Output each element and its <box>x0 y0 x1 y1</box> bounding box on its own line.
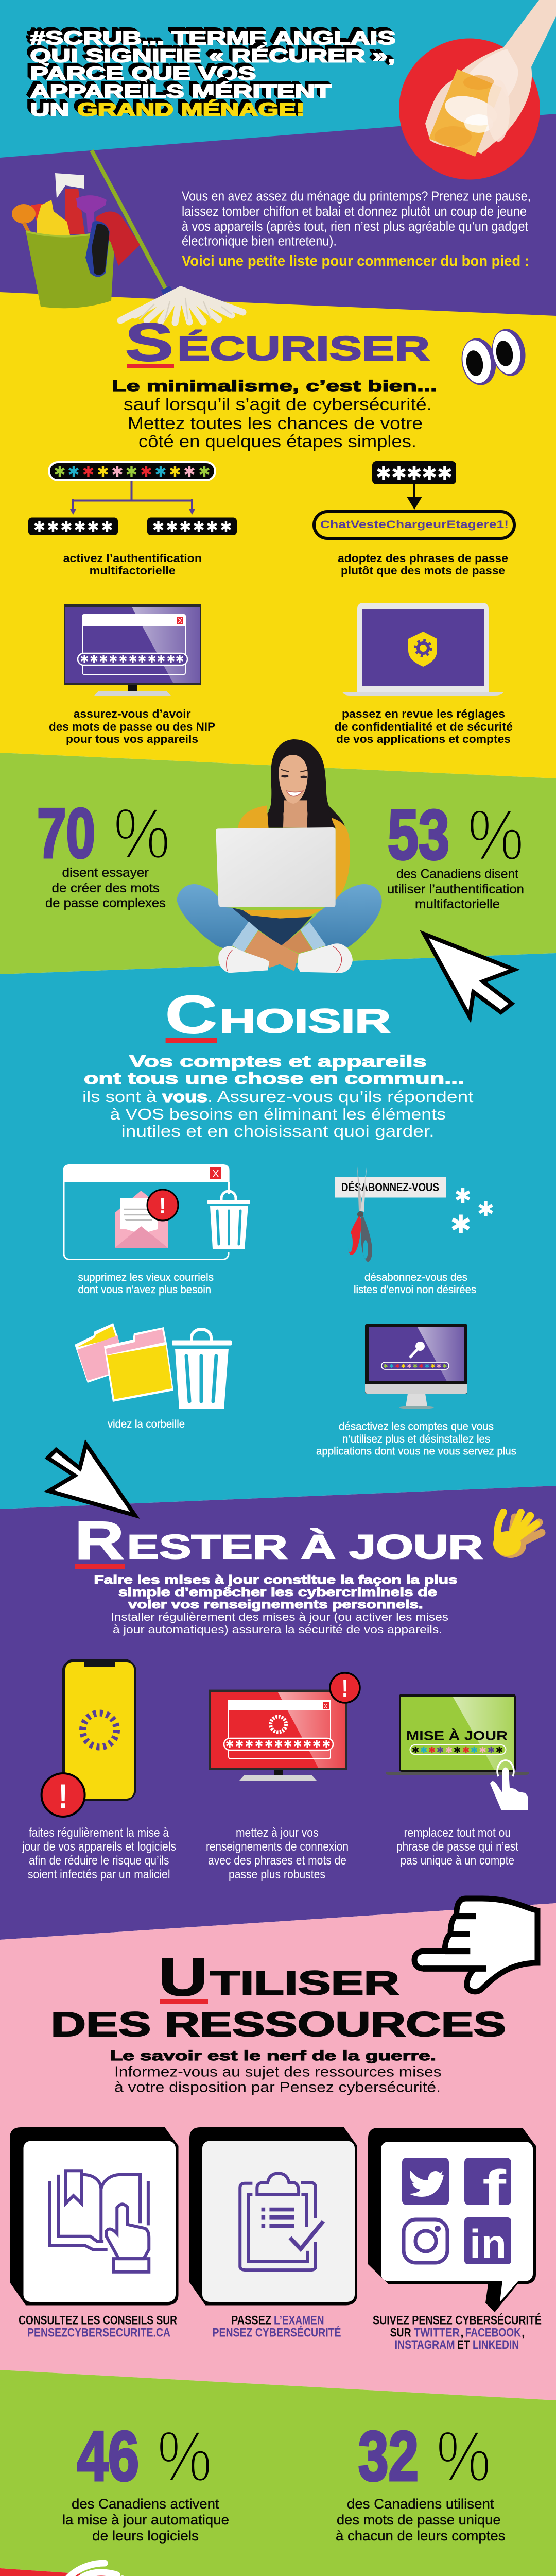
text block: choisir intro: ils sont à <box>82 1088 157 1106</box>
panel background: securiser yellow <box>0 292 556 778</box>
caption: deactivate accounts: n’utilisez plus et désinstallez les <box>342 1433 490 1445</box>
icon: multifactor authentication: ✱ <box>74 518 86 535</box>
icon: desktop with key and password: ✱ <box>401 1363 406 1369</box>
icon: desktop with key and password: ✱ <box>442 1363 447 1369</box>
stat: 70 percent: % <box>113 793 170 874</box>
stat: 32 percent <box>336 2416 506 2544</box>
title: GRAND MÉNAGE! <box>77 99 305 120</box>
icon: passphrase: ✱ <box>406 463 422 484</box>
icon: multifactor authentication: ✱ <box>183 463 196 480</box>
icon: desktop with key and password: ✱ <box>395 1363 400 1369</box>
icon: passphrase: ✱ <box>437 463 453 484</box>
icon: desktop monitor password: ✱ <box>176 653 184 665</box>
caption: update credentials: renseignements de connexion <box>206 1840 349 1854</box>
caption: unsubscribe: désabonnez-vous des <box>364 1272 467 1283</box>
stat: 70 percent: 70 <box>37 794 95 872</box>
caption: old emails: dont vous n’avez plus besoin <box>78 1284 211 1296</box>
caption: update credentials: mettez à jour vos <box>236 1826 318 1840</box>
icon: red monitor login with alert: X <box>323 1703 328 1710</box>
caption: passwords: des mots de passe ou des NIP <box>49 720 215 733</box>
caption: conseils: PENSEZCYBERSECURITE.CA <box>27 2326 170 2340</box>
text block: securiser intro: sauf lorsqu’il s’agit de cybersécurité. <box>124 395 432 414</box>
icon: multifactor authentication: ✱ <box>154 463 167 480</box>
icon: green laptop update with hand: ✱ <box>479 1745 486 1756</box>
icon: red monitor login with alert: ✱ <box>322 1738 331 1750</box>
icon: passphrase: ChatVesteChargeurEtagere1! <box>320 519 509 531</box>
icon: red monitor login with alert: ✱ <box>265 1738 273 1750</box>
caption: examen: L’EXAMEN <box>274 2314 324 2328</box>
stat: 32 percent: à chacun de leurs comptes <box>336 2528 506 2544</box>
stat: 53 percent: des Canadiens disent <box>396 867 518 882</box>
icon: linkedin: in <box>470 2221 507 2266</box>
caption: conseils <box>19 2314 177 2340</box>
icon: multifactor authentication: ✱ <box>198 463 211 480</box>
icon: passphrase: ✱ <box>391 463 407 484</box>
icon: multifactor authentication: ✱ <box>166 518 178 535</box>
icon: red monitor login with alert: ✱ <box>312 1738 321 1750</box>
stat: 53 percent: % <box>467 794 524 875</box>
caption: social: INSTAGRAM <box>395 2338 455 2352</box>
text block: ressources intro: Le savoir est le nerf de la guerre. <box>110 2048 436 2063</box>
heading: rester a jour: R <box>75 1511 124 1570</box>
stat: 46 percent: la mise à jour automatique <box>62 2512 229 2528</box>
text block: choisir intro: à VOS besoins en éliminant les éléments <box>110 1105 446 1123</box>
caption: examen: PENSEZ CYBERSÉCURITÉ <box>212 2326 341 2340</box>
caption: passphrase <box>338 552 508 577</box>
panel: rester a jour <box>22 1511 542 1882</box>
icon: facebook <box>464 2158 511 2217</box>
icon: facebook: f <box>482 2160 507 2217</box>
icon: passphrase <box>314 461 514 538</box>
icon: multifactor authentication: ✱ <box>193 518 205 535</box>
stat: 53 percent <box>387 794 524 911</box>
stat: 46 percent: de leurs logiciels <box>92 2528 199 2544</box>
heading: choisir: HOISIR <box>220 1002 391 1040</box>
icon: folders and trash <box>75 1323 232 1409</box>
panel background: header teal <box>0 0 556 319</box>
icon: red monitor login with alert: ✱ <box>284 1738 292 1750</box>
text block: rester intro: Installer régulièrement des mises à jour (ou activer les mises <box>111 1611 448 1623</box>
icon: multifactor authentication: ✱ <box>33 518 45 535</box>
stat: 32 percent: 32 <box>358 2417 419 2495</box>
text block: ressources intro: Informez-vous au sujet des ressources mises <box>114 2064 442 2080</box>
panel background: ressources pink <box>0 1903 556 2400</box>
icon: multifactor authentication: ✱ <box>220 518 232 535</box>
icon: green laptop update with hand: ✱ <box>495 1745 503 1756</box>
icon: green laptop update with hand: ✱ <box>487 1745 495 1756</box>
icon: desktop monitor password: ✱ <box>148 653 156 665</box>
caption: update devices: jour de vos appareils et logiciels <box>22 1840 176 1854</box>
title: QUI SIGNIFIE « RÉCURER », <box>30 45 395 66</box>
text block: intro: à vos appareils (après tout, rien n’est plus agréable qu’un gadget <box>182 219 528 234</box>
panel: choisir <box>48 985 516 1515</box>
stat: 46 percent <box>62 2416 229 2544</box>
icon: multifactor authentication: ✱ <box>169 463 181 480</box>
text block: securiser intro: côté en quelques étapes simples. <box>138 432 416 451</box>
icon: green laptop update with hand: ✱ <box>411 1745 420 1756</box>
panel background: intro purple <box>0 114 556 319</box>
text block: intro: électronique bien entretenu). <box>182 234 337 248</box>
icon: multifactor authentication: ✱ <box>140 463 152 480</box>
title <box>30 27 395 120</box>
icon: scissors cutting unsubscribe: ✱ <box>477 1198 494 1222</box>
caption: update devices: afin de réduire le risque qu’ils <box>29 1854 169 1868</box>
panel: stats 46 and 32 <box>62 2416 506 2544</box>
icon: fingerprint <box>60 2563 144 2576</box>
icon: multifactor authentication: ✱ <box>206 518 218 535</box>
caption: social <box>373 2313 542 2352</box>
heading: utiliser des ressources: DES RESSOURCES <box>50 2005 506 2044</box>
icon: multifactor authentication <box>28 462 237 535</box>
icon: green laptop update with hand: ✱ <box>453 1745 461 1756</box>
title: PARCE QUE VOS <box>30 63 256 84</box>
card: social media icons <box>368 2128 536 2312</box>
icon: desktop with key and password: ✱ <box>419 1363 424 1369</box>
icon: desktop monitor password: ✱ <box>109 653 117 665</box>
stat: 70 percent: disent essayer <box>62 866 149 880</box>
text block: securiser intro: Mettez toutes les chances de votre <box>128 414 423 433</box>
text block: securiser intro: Le minimalisme, c’est bien... <box>112 378 437 395</box>
icon: twitter <box>402 2158 449 2205</box>
caption: passphrase: adoptez des phrases de passe <box>338 552 508 565</box>
caption: passwords: pour tous vos appareils <box>66 733 198 745</box>
icon: email window and trash <box>63 1164 250 1259</box>
caption: privacy settings: passez en revue les réglages <box>342 707 505 720</box>
caption: passwords: assurez-vous d’avoir <box>74 707 191 720</box>
caption: passwords <box>49 707 215 745</box>
icon: instagram <box>404 2219 447 2263</box>
stat: 46 percent: des Canadiens activent <box>72 2496 219 2512</box>
icon: multifactor authentication: ✱ <box>179 518 192 535</box>
stat: 32 percent: % <box>436 2416 491 2497</box>
icon: desktop monitor password <box>64 604 201 696</box>
text block: rester intro: à jour automatiques) assurera la sécurité de vos appareils. <box>113 1623 442 1636</box>
heading: rester a jour <box>75 1511 483 1570</box>
caption: social: LINKEDIN <box>473 2338 519 2352</box>
icon: red monitor login with alert: ✱ <box>245 1738 253 1750</box>
heading: choisir <box>165 985 391 1045</box>
icon: multifactor authentication: ✱ <box>82 463 94 480</box>
icon: scissors cutting unsubscribe <box>335 1166 494 1262</box>
heading: utiliser des ressources <box>50 1947 506 2044</box>
icon: green laptop update with hand: ✱ <box>470 1745 478 1756</box>
icon: cursor arrow <box>424 934 514 1017</box>
icon: desktop monitor password: ✱ <box>119 653 127 665</box>
icon: email window and trash: ! <box>159 1193 166 1218</box>
caption: unsubscribe: listes d’envoi non désirées <box>354 1284 476 1296</box>
panel background: bloquer red <box>0 2568 556 2576</box>
text block: choisir intro: . Assurez-vous qu’ils répondent <box>207 1088 474 1106</box>
title: APPAREILS MÉRITENT <box>30 81 332 102</box>
icon: cursor arrow pointing down-right <box>48 1444 135 1515</box>
text block: ressources intro: à votre disposition par Pensez cybersécurité. <box>114 2079 441 2095</box>
icon: desktop with key and password: ✱ <box>425 1363 429 1369</box>
icon: phone updating with alert: ! <box>59 1777 68 1815</box>
stat: 53 percent: 53 <box>388 795 449 874</box>
panel background: rester a jour purple <box>0 1486 556 1940</box>
icon: desktop with key and password: ✱ <box>407 1363 412 1369</box>
text block: rester intro: voler vos renseignements personnels. <box>128 1598 423 1611</box>
stat: 46 percent: 46 <box>77 2417 139 2495</box>
text block: choisir intro: inutiles et en choisissant quoi garder. <box>121 1122 435 1140</box>
icon: phone updating with alert <box>42 1659 136 1817</box>
icon: multifactor authentication: ✱ <box>67 463 80 480</box>
caption: unique passwords: pas unique à un compte <box>401 1854 514 1868</box>
text block: choisir intro: Vos comptes et appareils <box>129 1052 426 1071</box>
icon: clapping hands <box>493 1512 542 1558</box>
icon: red monitor login with alert: ✱ <box>235 1738 244 1750</box>
caption: social: ET <box>457 2338 470 2352</box>
icon: laptop shield gear <box>342 603 503 696</box>
stat: 53 percent: utiliser l’authentification <box>387 882 524 896</box>
icon: multifactor authentication: ✱ <box>126 463 137 480</box>
heading: securiser: ÉCURISER <box>177 329 430 367</box>
icon: desktop monitor password: ✱ <box>80 653 89 665</box>
heading: securiser <box>125 313 430 372</box>
icon: desktop with key and password <box>365 1324 467 1409</box>
icon: red monitor login with alert: ✱ <box>293 1738 302 1750</box>
panel: securiser <box>28 313 529 745</box>
icon: cartoon eyes <box>458 326 529 388</box>
icon: pointing hand <box>414 1899 537 1992</box>
icon: hand with sponge in red circle <box>399 0 556 179</box>
stat: 32 percent: des mots de passe unique <box>337 2512 500 2528</box>
caption: examen: PASSEZ <box>231 2314 271 2328</box>
caption: update credentials: passe plus robustes <box>229 1868 325 1882</box>
icon: multifactor authentication: ✱ <box>47 518 59 535</box>
icon: desktop with key and password: ✱ <box>413 1363 418 1369</box>
stat: 70 percent: de passe complexes <box>45 896 166 910</box>
caption: social: , <box>460 2326 464 2340</box>
text block: rester intro: simple d’empêcher les cybercriminels de <box>118 1585 437 1599</box>
caption: privacy settings: de vos applications et comptes <box>336 733 511 745</box>
heading: rester a jour: ESTER À JOUR <box>127 1528 483 1566</box>
icon: multifactor authentication: ✱ <box>54 463 66 480</box>
icon: scissors cutting unsubscribe: DÉSABONNEZ-VOUS <box>341 1181 439 1194</box>
photo: woman with laptop <box>177 739 382 973</box>
icon: multifactor authentication: ✱ <box>101 518 113 535</box>
icon: desktop monitor password: ✱ <box>129 653 137 665</box>
text block: rester intro: Faire les mises à jour constitue la façon la plus <box>94 1573 457 1586</box>
text block: intro: Voici une petite liste pour commencer du bon pied : <box>182 253 529 269</box>
panel: header <box>30 0 556 179</box>
text block: choisir intro <box>82 1052 474 1140</box>
caption: deactivate accounts: désactivez les comptes que vous <box>339 1421 494 1432</box>
icon: scissors cutting unsubscribe: ✱ <box>450 1210 472 1240</box>
icon: email window and trash: X <box>212 1168 219 1180</box>
icon: multifactor authentication: ✱ <box>152 518 164 535</box>
card: conseils book icon <box>10 2127 178 2305</box>
caption: passphrase: plutôt que des mots de passe <box>341 564 505 577</box>
icon: multifactor authentication: ✱ <box>60 518 73 535</box>
heading: utiliser des ressources: TILISER <box>210 1964 399 2002</box>
icon: green laptop update with hand: ✱ <box>420 1745 428 1756</box>
icon: desktop monitor password: ✱ <box>90 653 98 665</box>
stat: 53 percent: multifactorielle <box>415 897 500 911</box>
caption: update credentials: avec des phrases et mots de <box>208 1854 346 1868</box>
icon: multifactor authentication: ✱ <box>87 518 99 535</box>
stat: 32 percent: des Canadiens utilisent <box>347 2496 494 2512</box>
caption: conseils: CONSULTEZ LES CONSEILS SUR <box>19 2314 177 2328</box>
panel: intro <box>12 150 531 323</box>
caption: multifactor: multifactorielle <box>90 564 176 577</box>
heading: securiser: S <box>125 313 173 372</box>
caption: unique passwords: remplacez tout mot ou <box>404 1826 511 1840</box>
icon: multifactor authentication: ✱ <box>97 463 109 480</box>
icon: desktop with key and password: ✱ <box>389 1363 394 1369</box>
panel background: choisir teal <box>0 953 556 1509</box>
icon: desktop with key and password: ✱ <box>383 1363 388 1369</box>
icon: green laptop update with hand: ✱ <box>462 1745 470 1756</box>
text block: intro: laissez tomber chiffon et balai et donnez plutôt un coup de jeune <box>182 205 527 219</box>
icon: desktop with key and password: ✱ <box>437 1363 441 1369</box>
icon: red monitor login with alert: ✱ <box>225 1738 234 1750</box>
heading: utiliser des ressources: U <box>159 1947 207 2007</box>
stat: 70 percent <box>37 793 170 910</box>
caption: examen <box>212 2314 341 2340</box>
icon: green laptop update with hand: MISE À JOUR <box>406 1728 508 1743</box>
icon: red monitor login with alert <box>209 1673 360 1781</box>
icon: desktop monitor password: ✱ <box>138 653 146 665</box>
caption: update devices: faites régulièrement la mise à <box>29 1826 169 1840</box>
panel: stats 70 and 53 <box>37 739 524 1017</box>
caption: social: SUR <box>390 2326 411 2340</box>
card: examen clipboard icon <box>189 2127 357 2305</box>
icon: green laptop update with hand: ✱ <box>445 1745 453 1756</box>
text block: securiser intro <box>112 378 437 451</box>
caption: old emails <box>78 1272 214 1296</box>
caption: privacy settings <box>335 707 513 745</box>
icon: passphrase: ✱ <box>376 463 391 484</box>
caption: social: FACEBOOK <box>465 2326 522 2340</box>
panel background: stats green <box>0 753 556 974</box>
icon: green laptop update with hand: ✱ <box>436 1745 444 1756</box>
icon: red monitor login with alert: ✱ <box>255 1738 263 1750</box>
icon: desktop monitor password: ✱ <box>99 653 108 665</box>
heading: choisir: C <box>165 985 217 1045</box>
icon: desktop with key and password: ✱ <box>430 1363 436 1369</box>
caption: privacy settings: de confidentialité et de sécurité <box>335 720 513 733</box>
text block: ressources intro <box>110 2048 442 2095</box>
icon: green laptop update with hand: ✱ <box>428 1745 436 1756</box>
text block: choisir intro: ont tous une chose en commun... <box>84 1069 464 1088</box>
caption: update devices: soient infectés par un maliciel <box>28 1868 170 1882</box>
icon: scissors cutting unsubscribe: ✱ <box>454 1184 472 1208</box>
caption: unique passwords: phrase de passe qui n’est <box>396 1840 518 1854</box>
text block: rester intro <box>94 1573 457 1636</box>
title: UN <box>30 99 69 120</box>
caption: old emails: supprimez les vieux courriels <box>78 1272 214 1283</box>
icon: green laptop update with hand <box>386 1694 529 1810</box>
icon: red monitor login with alert: ✱ <box>303 1738 311 1750</box>
text block: intro <box>182 190 531 269</box>
caption: social: , <box>522 2326 525 2340</box>
caption: deactivate accounts: applications dont vous ne vous servez plus <box>316 1446 516 1457</box>
caption: update credentials <box>206 1826 349 1882</box>
caption: unique passwords <box>396 1826 518 1868</box>
caption: social: TWITTER <box>414 2326 460 2340</box>
caption: multifactor: activez l’authentification <box>63 552 202 565</box>
icon: red monitor login with alert: ✱ <box>274 1738 283 1750</box>
stat: 46 percent: % <box>157 2416 212 2497</box>
caption: multifactor <box>63 552 202 577</box>
caption: update devices <box>22 1826 176 1882</box>
text block: choisir intro: vous <box>162 1088 207 1106</box>
icon: bucket and mop <box>12 150 243 323</box>
caption: deactivate accounts <box>316 1421 516 1457</box>
icon: multifactor authentication: ✱ <box>111 463 124 480</box>
stat: 70 percent: de créer des mots <box>51 881 160 895</box>
icon: desktop monitor password: X <box>178 617 182 624</box>
panel: bloquer <box>60 2563 490 2576</box>
caption: empty trash: videz la corbeille <box>108 1418 185 1430</box>
caption: unsubscribe <box>354 1272 476 1296</box>
panel background: stats green 2 <box>0 2370 556 2576</box>
icon: red monitor login with alert: ! <box>342 1675 348 1702</box>
icon: desktop monitor password: ✱ <box>167 653 175 665</box>
panel: utiliser des ressources <box>10 1947 542 2352</box>
icon: desktop monitor password: ✱ <box>157 653 165 665</box>
title: #SCRUB... TERME ANGLAIS <box>30 27 395 48</box>
icon: passphrase: ✱ <box>422 463 437 484</box>
